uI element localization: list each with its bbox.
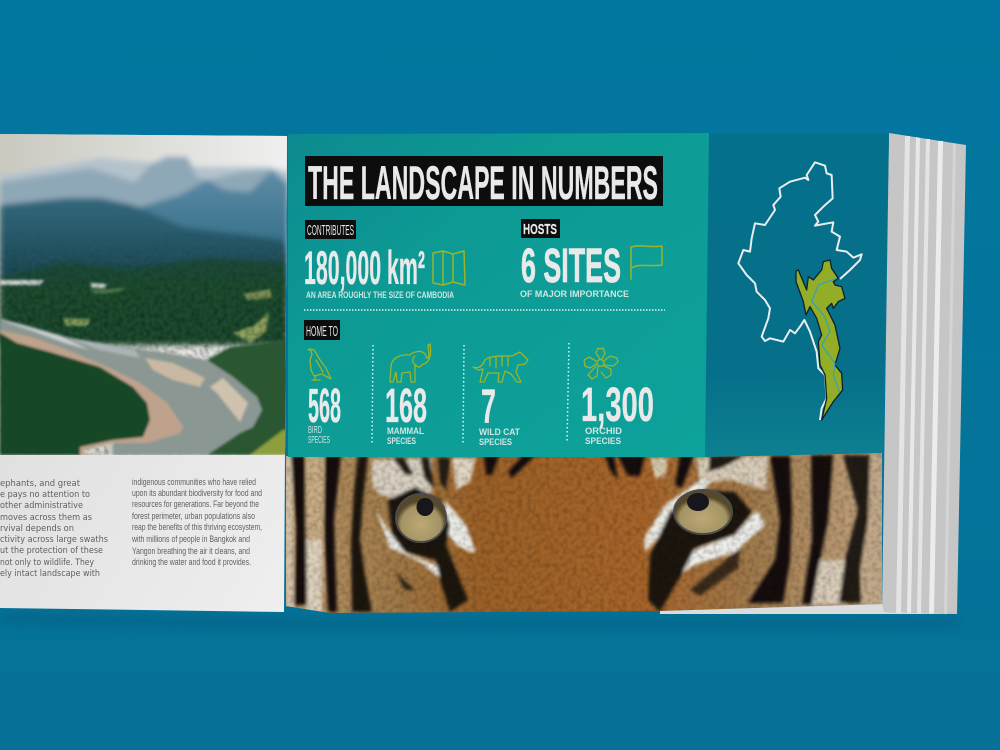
icon: tiger <box>473 352 528 382</box>
caption: cambodia: AN AREA ROUGHLY THE SIZE OF CAMBODIA <box>306 290 454 300</box>
stat: wild cats: WILD CAT <box>479 427 520 437</box>
icon: bird <box>308 349 331 380</box>
book shadow <box>0 612 960 630</box>
stat: orchids: 1,300 <box>581 379 654 432</box>
right text column: drinking the water and food it provides. <box>132 557 251 567</box>
conservation area <box>796 260 845 420</box>
stripes right <box>802 455 833 604</box>
left page <box>0 134 290 612</box>
panel: teal numbers: 180,000 km² <box>304 241 425 294</box>
map of Myanmar <box>738 162 862 420</box>
sand bank <box>0 330 183 455</box>
left text column: e pays no attention to <box>0 490 90 500</box>
landscape photo <box>0 134 290 455</box>
label: home to <box>304 320 340 340</box>
right slope forest <box>207 340 288 455</box>
panel: map <box>705 133 889 457</box>
label: contributes <box>305 220 356 239</box>
left text column: other administrative <box>0 501 83 511</box>
stat: mammals <box>385 344 431 446</box>
panel: teal numbers: CONTRIBUTES <box>307 222 354 239</box>
right text column: indigenous communities who have relied <box>132 477 256 487</box>
left text column: ephants, and great <box>0 479 80 489</box>
forest grain <box>0 254 286 455</box>
stat: wild cats <box>473 352 528 447</box>
river <box>812 278 839 392</box>
right eye <box>674 490 732 534</box>
page bottom edge <box>660 604 957 614</box>
label: hosts: HOSTS <box>523 221 557 238</box>
stat: orchids: SPECIES <box>585 436 621 446</box>
left text column: ut the protection of these <box>0 546 103 556</box>
left text column: rvival depends on <box>0 524 74 534</box>
left text column: not only to wildlife. They <box>0 558 95 568</box>
right text column: forest perimeter, urban populations also <box>132 511 255 521</box>
icon: elephant <box>390 344 431 382</box>
cream fur bands <box>306 456 324 612</box>
page stack <box>882 133 966 614</box>
right text column: upon its abundant biodiversity for food and <box>132 488 262 498</box>
stat: mammals: 168 <box>385 380 427 433</box>
stat: birds: BIRD <box>308 425 322 436</box>
right text column: reap the benefits of this thriving ecosystem, <box>132 522 262 532</box>
stat: wild cats: 7 <box>481 381 496 434</box>
left eye <box>396 494 446 542</box>
panel: teal numbers: 568 <box>308 380 341 433</box>
left text column: moves across them as <box>0 513 92 523</box>
foreground forest <box>0 333 150 455</box>
stat: birds: SPECIES <box>308 435 330 446</box>
left text column <box>0 479 108 579</box>
right text column: Yangon breathing the air it cleans, and <box>132 546 250 556</box>
fur grain <box>285 450 885 615</box>
caption: major importance: OF MAJOR IMPORTANCE <box>520 289 629 299</box>
right text column: resources for generations. Far beyond the <box>132 499 259 509</box>
label: hosts <box>521 219 560 238</box>
stat: wild cats: SPECIES <box>479 437 512 447</box>
stat: orchids: ORCHID <box>585 426 623 436</box>
white eye markings <box>445 500 476 552</box>
stat: mammals: SPECIES <box>387 436 416 446</box>
stat: orchids <box>581 348 654 446</box>
stat: 6 sites: 6 SITES <box>521 240 621 293</box>
right text column <box>131 477 262 567</box>
icon: map <box>433 251 465 285</box>
icon: orchid <box>584 348 618 379</box>
stat: mammals: MAMMAL <box>387 426 424 436</box>
left text column: ctivity across large swaths <box>0 535 108 545</box>
dark eye markings <box>388 487 468 612</box>
right text column: with millions of people in Bangkok and <box>131 534 250 544</box>
river <box>0 318 262 455</box>
stripes left <box>291 456 307 605</box>
icon: flag <box>631 246 662 279</box>
panel: teal numbers <box>288 133 710 457</box>
title: THE LANDSCAPE IN NUMBERS <box>308 156 658 209</box>
tiger photo <box>285 450 885 615</box>
left text column: ely intact landscape with <box>0 569 100 579</box>
title <box>305 156 663 209</box>
forehead white patches <box>372 458 432 500</box>
panel: teal numbers: HOME TO <box>306 323 338 340</box>
stat: birds <box>308 349 341 446</box>
